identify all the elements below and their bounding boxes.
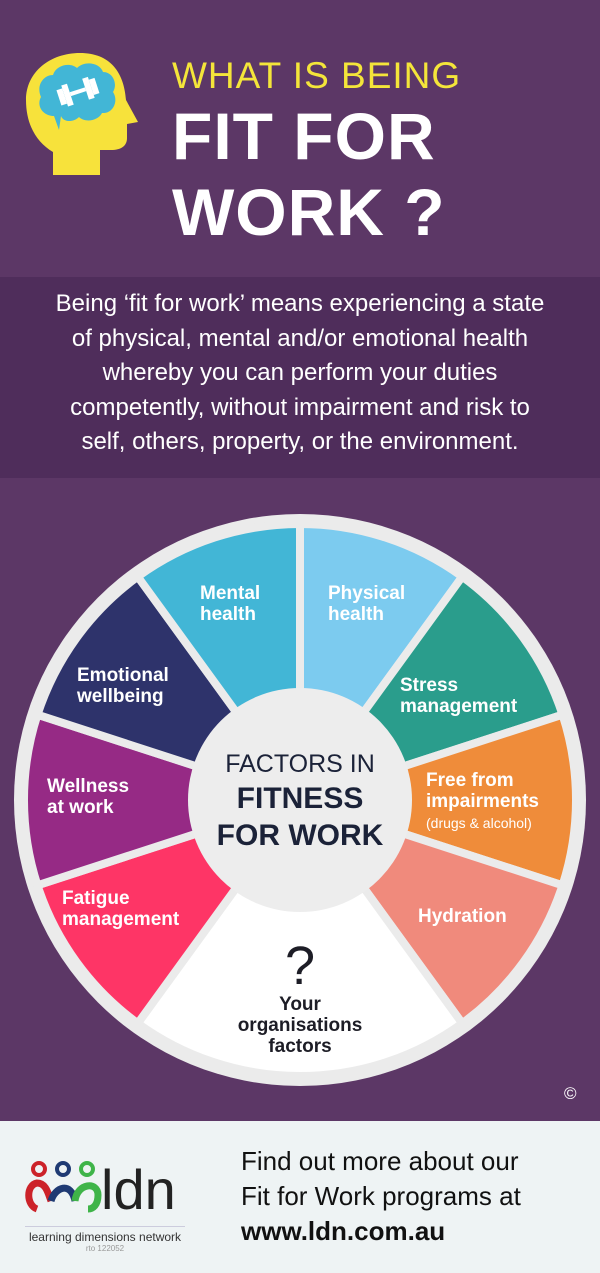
footer text: Fit for Work programs at bbox=[241, 1181, 521, 1211]
label: physical health bbox=[328, 583, 405, 625]
label: your organisations factors: ? bbox=[285, 936, 315, 996]
label: free from impairments: impairments bbox=[426, 791, 539, 812]
label: hydration: Hydration bbox=[418, 906, 507, 927]
label: free from impairments: Free from bbox=[426, 770, 514, 791]
label: emotional wellbeing: wellbeing bbox=[77, 686, 164, 707]
center heading: FACTORS IN bbox=[225, 750, 375, 778]
label: your organisations factors: factors bbox=[268, 1036, 332, 1057]
label: physical health: Physical bbox=[328, 583, 405, 604]
description band bbox=[0, 277, 600, 478]
label: mental health: health bbox=[200, 604, 256, 625]
footer text: www.ldn.com.au bbox=[241, 1216, 445, 1246]
label: mental health bbox=[200, 583, 260, 625]
footer bbox=[0, 1121, 600, 1273]
center heading: FITNESS bbox=[237, 782, 363, 815]
logo: ldn bbox=[25, 1158, 185, 1253]
label: emotional wellbeing bbox=[77, 665, 169, 707]
label: stress management bbox=[400, 675, 517, 717]
description text: whereby you can perform your duties bbox=[103, 359, 497, 386]
footer text bbox=[240, 1146, 521, 1246]
segment labels bbox=[47, 583, 539, 1057]
copyright mark: © bbox=[564, 1084, 577, 1103]
label: free from impairments: (drugs & alcohol) bbox=[426, 815, 532, 831]
title: WHAT IS BEING bbox=[172, 55, 461, 96]
footer: rto 122052 bbox=[86, 1244, 124, 1253]
label: stress management: Stress bbox=[400, 675, 458, 696]
label: free from impairments bbox=[426, 770, 539, 831]
label: fatigue management: Fatigue bbox=[62, 888, 130, 909]
description text: competently, without impairment and risk to bbox=[70, 394, 530, 420]
icon: head with brain and dumbbell bbox=[26, 53, 138, 175]
title: FIT FOR bbox=[172, 99, 436, 173]
label: your organisations factors: organisations bbox=[238, 1015, 362, 1036]
label: emotional wellbeing: Emotional bbox=[77, 665, 169, 686]
label: fatigue management bbox=[62, 888, 179, 930]
center heading bbox=[217, 750, 383, 852]
footer text: Find out more about our bbox=[241, 1146, 518, 1176]
description text bbox=[56, 290, 544, 455]
label: your organisations factors: Your bbox=[279, 994, 321, 1015]
label: mental health: Mental bbox=[200, 583, 260, 604]
description text: self, others, property, or the environment. bbox=[81, 428, 519, 455]
description text: of physical, mental and/or emotional health bbox=[72, 324, 528, 352]
label: physical health: health bbox=[328, 604, 384, 625]
label: stress management: management bbox=[400, 696, 517, 717]
center heading: FOR WORK bbox=[217, 819, 383, 852]
wheel chart: factors in fitness for work bbox=[14, 514, 586, 1103]
title bbox=[172, 55, 461, 249]
logo: ldn: learning dimensions network bbox=[29, 1230, 181, 1244]
label: fatigue management: management bbox=[62, 909, 179, 930]
label: wellness at work: Wellness bbox=[47, 776, 129, 797]
label: wellness at work: at work bbox=[47, 797, 114, 818]
label: wellness at work bbox=[47, 776, 129, 818]
label: your organisations factors bbox=[238, 936, 362, 1057]
description text: Being ‘fit for work’ means experiencing a state bbox=[56, 290, 544, 317]
title: WORK ? bbox=[172, 175, 446, 249]
